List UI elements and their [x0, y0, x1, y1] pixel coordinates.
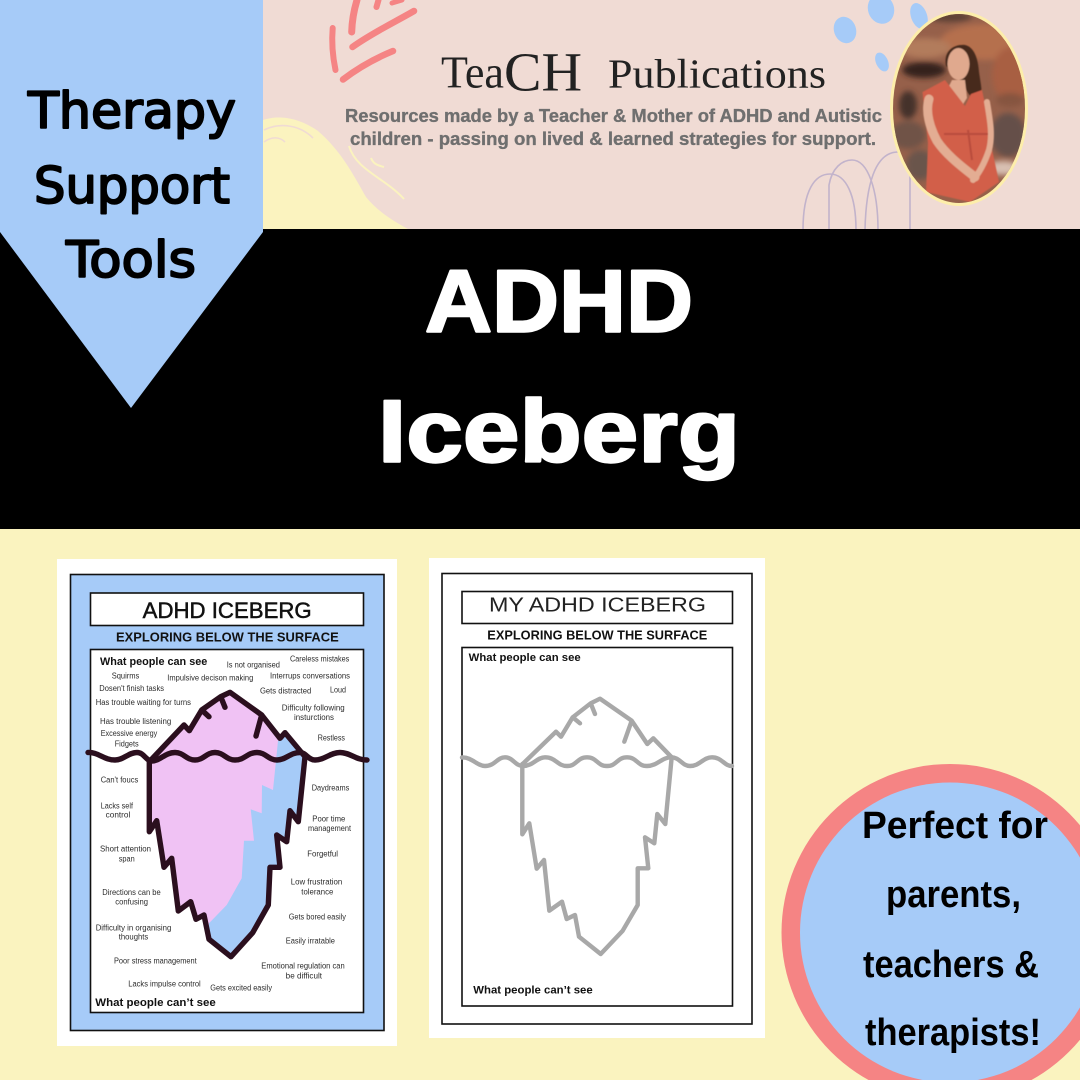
- labels: what people can see: Interrups conversations: [270, 672, 350, 681]
- labels: what people can't see: management: [308, 824, 352, 833]
- labels: what people can't see: What people can’t see: [95, 997, 216, 1009]
- main title: Iceberg: [378, 382, 740, 480]
- labels: what people can't see: Poor stress management: [114, 957, 197, 966]
- blank worksheet subtitle: EXPLORING BELOW THE SURFACE: [487, 628, 707, 642]
- labels: what people can't see: Daydreams: [312, 783, 349, 792]
- blank iceberg outline: [462, 699, 732, 954]
- main title: [378, 252, 740, 480]
- labels: what people can't see: Easily irratable: [286, 937, 336, 946]
- inner white panel: [90, 650, 364, 1012]
- blank worksheet labels: What people can’t see: [473, 984, 593, 996]
- circle badge: perfect for parents, teachers and therapists: Perfect for: [862, 805, 1048, 847]
- labels: what people can see: Gets distracted: [260, 686, 311, 695]
- logo wordmark: Publications: [608, 50, 826, 96]
- labels: what people can't see: Forgetful: [307, 850, 338, 859]
- labels: what people can see: Squirms: [112, 672, 139, 681]
- decoration: coral leaf strokes: [332, 0, 414, 80]
- header banner: [263, 0, 1080, 230]
- labels: what people can't see: Low frustration: [291, 878, 342, 887]
- labels: what people can't see: span: [119, 854, 135, 863]
- pennant: therapy support tools: Tools: [65, 231, 196, 289]
- tagline: children - passing on lived & learned strategies for support.: [350, 128, 876, 149]
- labels: what people can't see: be difficult: [286, 971, 323, 980]
- labels: what people can see: Is not organised: [227, 660, 280, 669]
- labels: what people can see: Impulsive decison making: [167, 673, 253, 682]
- pennant: therapy support tools: Therapy: [27, 82, 236, 140]
- worksheet title box: [90, 593, 364, 626]
- labels: what people can't see: control: [106, 811, 131, 820]
- worksheet: coloured ADHD iceberg: [57, 559, 397, 1046]
- labels: what people can see: Difficulty following: [282, 703, 345, 712]
- labels: what people can't see: Gets bored easily: [289, 913, 346, 922]
- iceberg illustration: [88, 692, 367, 957]
- tagline: [345, 105, 882, 149]
- labels: what people can't see: Emotional regulation can: [261, 962, 345, 971]
- circle badge: perfect for parents, teachers and therapists: [782, 764, 1080, 1080]
- main title: ADHD: [425, 252, 693, 350]
- blank worksheet title box: [462, 592, 732, 624]
- labels: what people can see: What people can see: [100, 656, 207, 668]
- pennant: therapy support tools: Support: [34, 157, 230, 215]
- labels: what people can't see: Lacks self: [101, 801, 134, 810]
- labels: what people can see: Careless mistakes: [290, 655, 349, 664]
- circle badge: perfect for parents, teachers and therapists: therapists!: [865, 1012, 1041, 1054]
- labels: what people can see: Has trouble waiting for turns: [96, 698, 191, 707]
- worksheet subtitle: EXPLORING BELOW THE SURFACE: [116, 631, 339, 645]
- portrait photo: [890, 10, 1032, 206]
- logo wordmark: CH: [504, 42, 582, 102]
- black title band: [0, 229, 1080, 529]
- labels: what people can't see: Short attention: [100, 845, 151, 854]
- labels: what people can't see: thoughts: [119, 933, 148, 942]
- circle badge: perfect for parents, teachers and therapists: teachers &: [863, 944, 1039, 986]
- labels: what people can't see: Can't foucs: [101, 775, 138, 784]
- labels: what people can't see: Lacks impulse control: [128, 979, 201, 988]
- labels: what people can't see: Directions can be: [102, 888, 161, 897]
- circle badge: perfect for parents, teachers and therapists: parents,: [886, 874, 1021, 916]
- blank worksheet title box: MY ADHD ICEBERG: [489, 595, 706, 617]
- labels: what people can see: Fidgets: [115, 740, 139, 749]
- labels: what people can see: Loud: [330, 686, 346, 695]
- decoration: yellow blob: [263, 117, 410, 230]
- labels: what people can't see: Difficulty in organising: [96, 923, 171, 932]
- labels: what people can't see: Poor time: [312, 814, 346, 823]
- labels: what people can't see: [95, 775, 352, 1009]
- blank worksheet labels: [469, 652, 593, 996]
- labels: what people can't see: tolerance: [301, 887, 334, 896]
- pennant: therapy support tools: [0, 0, 263, 408]
- decoration: purple arches: [803, 152, 910, 230]
- labels: what people can see: Restless: [318, 733, 345, 742]
- tagline: Resources made by a Teacher & Mother of ADHD and Autistic: [345, 105, 882, 126]
- blank worksheet labels: What people can see: [469, 652, 581, 664]
- worksheet title box: ADHD ICEBERG: [143, 598, 312, 623]
- labels: what people can't see: confusing: [115, 898, 148, 907]
- labels: what people can see: [96, 655, 350, 749]
- labels: what people can see: Has trouble listening: [100, 717, 171, 726]
- worksheet: blank my ADHD iceberg: [429, 558, 765, 1038]
- labels: what people can see: Dosen't finish tasks: [99, 684, 164, 693]
- logo wordmark: [441, 42, 826, 102]
- labels: what people can see: Excessive energy: [101, 729, 157, 738]
- decoration: blue drops: [830, 0, 931, 74]
- labels: what people can see: insturctions: [294, 713, 334, 722]
- labels: what people can't see: Gets excited easily: [210, 984, 272, 993]
- logo wordmark: Tea: [441, 48, 504, 98]
- blank inner panel: [462, 648, 732, 1006]
